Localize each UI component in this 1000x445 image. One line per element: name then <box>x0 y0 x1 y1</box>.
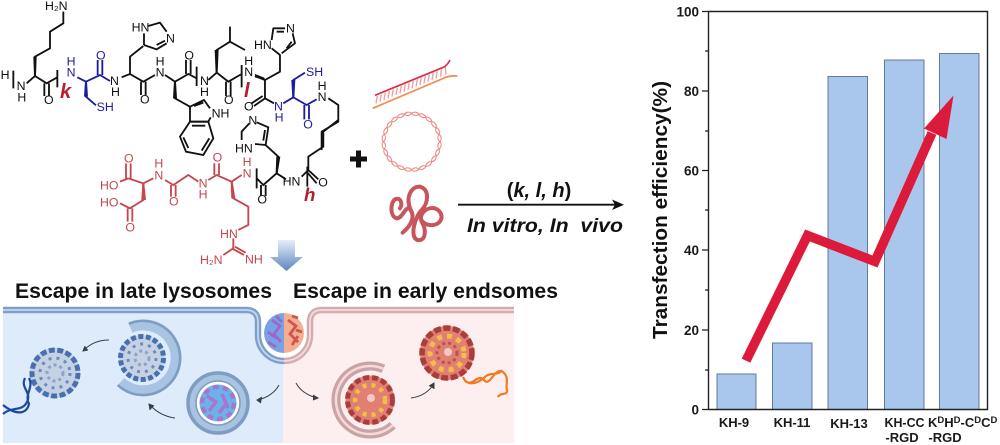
released blue nanoparticle with DNA <box>3 348 80 414</box>
red RGD peptide: O <box>169 194 179 208</box>
black atom labels, upper: H <box>17 90 26 104</box>
red RGD peptide <box>100 150 263 267</box>
red RGD peptide: NH <box>245 252 263 266</box>
bar chart <box>650 4 998 445</box>
y axis title: Transfection efficiency(%) <box>650 81 672 339</box>
black atom labels, upper: N <box>17 79 26 93</box>
arrow: into early endosome <box>296 383 318 400</box>
x axis labels: D <box>954 415 961 426</box>
black atom labels, upper: N <box>166 31 175 45</box>
blue cysteine residues: N <box>318 90 327 104</box>
blue cysteine residues: N <box>274 100 283 114</box>
blue cysteine residues: O <box>303 117 313 131</box>
red RGD peptide: H <box>154 157 163 171</box>
y tick labels: 60 <box>684 164 699 178</box>
lower peptide part, black: O <box>257 192 267 206</box>
red RGD peptide: N <box>199 177 208 191</box>
y tick labels: 40 <box>684 243 699 258</box>
cell membrane, blue side <box>3 310 284 361</box>
cell membrane, pink side <box>284 310 514 361</box>
wedge bonds <box>33 50 265 98</box>
blue cysteine residues: N <box>67 66 76 80</box>
red RGD peptide: N <box>154 168 163 182</box>
lower peptide part, black: h <box>304 184 315 205</box>
black atom labels, upper: N <box>110 74 119 88</box>
x axis labels: -RGD <box>885 430 919 445</box>
red RGD peptide: HN <box>220 227 238 241</box>
red RGD peptide: O <box>125 221 135 235</box>
black atom labels, upper: O <box>140 92 150 106</box>
x axis labels: D <box>991 415 998 426</box>
x axis labels: KH-9 <box>719 415 749 430</box>
x axis labels: D <box>937 415 944 426</box>
x axis labels: KH-13 <box>830 416 868 431</box>
x axis labels: C <box>981 415 991 430</box>
x axis labels: KH-CC <box>884 415 925 430</box>
black atom labels, upper: N <box>200 74 209 88</box>
red trend arrow <box>746 96 954 361</box>
nanoparticle entering cell <box>264 313 304 353</box>
blue cysteine residues: SH <box>97 100 114 114</box>
red RGD peptide: HO <box>100 178 119 192</box>
black atom labels, upper <box>1 0 295 120</box>
blue cysteine residues <box>67 48 327 131</box>
red RGD peptide: HO <box>100 196 119 210</box>
black peptide backbone, upper <box>13 12 338 150</box>
lower peptide part, black: N <box>248 113 257 127</box>
black atom labels, upper: H <box>1 68 10 82</box>
arrow: release <box>83 340 109 351</box>
black atom labels, upper: H <box>200 85 209 99</box>
black atom labels, upper: N <box>244 65 253 79</box>
blue cysteine residues: O <box>96 48 106 62</box>
red RGD peptide: O <box>213 150 222 164</box>
black atom labels, upper: N <box>156 66 165 80</box>
arrow <box>458 200 624 210</box>
bar: KH-CC-RGD <box>884 60 924 410</box>
bar: KH-9 <box>717 374 756 410</box>
red RGD peptide: N <box>243 166 252 180</box>
panel: late lysosome pathway <box>3 305 514 443</box>
reaction arrow with labels <box>458 180 624 237</box>
black atom labels, upper: HN <box>254 38 272 52</box>
y tick labels: 0 <box>691 402 699 418</box>
arrow: release from early endosome <box>411 383 434 398</box>
black atom labels, upper: H <box>156 55 165 69</box>
plus sign <box>350 150 367 168</box>
early endosome in blue zone <box>188 373 248 433</box>
released red nanoparticle with RNA <box>420 326 507 397</box>
black atom labels, upper: H <box>111 85 120 99</box>
label: k, l, h: (k, l, h) <box>507 180 571 202</box>
arrow: to broken lysosome <box>149 404 175 418</box>
bar: KDHD-CDCD-RGD <box>940 54 979 410</box>
down arrow <box>270 240 303 271</box>
x axis labels <box>719 415 998 445</box>
axes frame <box>708 12 988 410</box>
y tick labels: 100 <box>676 4 699 20</box>
y ticks <box>702 12 708 410</box>
bar: KH-13 <box>828 76 868 410</box>
heading: late lysosomes: Escape in late lysosomes <box>15 280 272 303</box>
black atom labels, upper: NH <box>212 106 229 120</box>
red RGD peptide: O <box>124 152 134 166</box>
lower peptide part, black: HN <box>235 142 253 156</box>
black atom labels, upper: HN <box>132 21 149 35</box>
blue cysteine residues: SH <box>306 65 323 79</box>
broken late lysosome <box>118 321 180 395</box>
bar: KH-11 <box>772 343 812 410</box>
nucleic acid cargos <box>373 60 457 240</box>
panel: early endosome pathway <box>283 311 514 443</box>
y tick labels <box>676 4 699 418</box>
black atom labels, upper: O <box>44 93 54 107</box>
blue cysteine residues: H <box>318 79 327 93</box>
black atom labels, upper: N <box>286 21 295 35</box>
label: in vitro, in vivo: In vitro, In vivo <box>467 215 623 237</box>
black atom labels, upper: H <box>244 54 253 68</box>
blue cysteine residues: H <box>67 55 76 69</box>
peptide structure <box>1 0 338 267</box>
icon: siRNA duplex <box>373 60 457 108</box>
x axis labels: -RGD <box>928 430 962 445</box>
blue cysteine residues: H <box>275 111 284 125</box>
broken early endosome <box>336 366 394 434</box>
red RGD peptide: H <box>243 155 252 169</box>
y tick labels: 20 <box>684 323 699 338</box>
repeat index k: k <box>60 81 72 103</box>
x axis labels: KH-11 <box>774 415 810 430</box>
icon: plasmid DNA ring <box>382 112 441 171</box>
x axis labels: -C <box>961 415 975 430</box>
red RGD peptide: H₂N <box>200 253 223 267</box>
black atom labels, upper: O <box>184 48 194 62</box>
y tick labels: 80 <box>684 84 699 99</box>
x axis labels: K <box>928 415 937 430</box>
lower peptide part, black: O <box>318 176 328 190</box>
lower peptide part, black <box>180 113 338 206</box>
icon: tangled mRNA <box>391 187 442 240</box>
arrow: endosome to lysosome <box>257 385 279 403</box>
heading: early endosomes: Escape in early endsomes <box>293 280 558 303</box>
membrane interior <box>258 305 310 361</box>
red RGD peptide: H <box>199 187 208 201</box>
x axis labels: H <box>944 415 954 430</box>
x axis labels: D <box>974 415 981 426</box>
black atom labels, upper: O <box>224 93 234 107</box>
repeat index l: l <box>244 80 250 102</box>
black atom labels, upper: O <box>244 100 254 114</box>
lower peptide part, black: HN <box>283 174 300 188</box>
